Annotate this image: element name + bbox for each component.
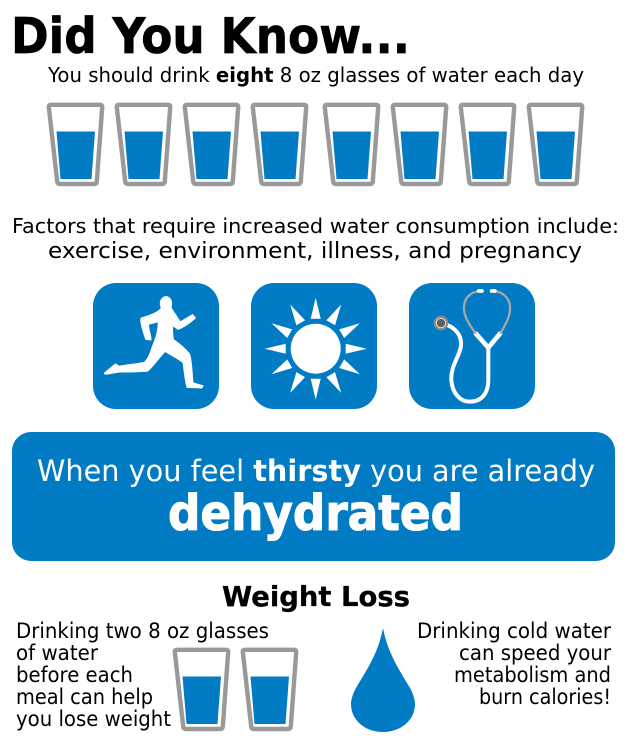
banner: dehydrated callout: dehydrated xyxy=(168,485,463,542)
heading: weight loss: Weight Loss xyxy=(222,580,410,613)
text: cold water: Drinking cold water xyxy=(417,619,611,643)
title: Did You Know... xyxy=(11,8,410,65)
icon: glass 6 xyxy=(393,105,446,184)
icon: glass 3 xyxy=(185,105,238,184)
text: cold water: metabolism and xyxy=(454,663,611,687)
factors text: Factors that require increased water consumption include: xyxy=(12,214,619,238)
icon: glass left xyxy=(175,650,228,729)
icon: glass 1 xyxy=(49,105,102,184)
icon: glass 5 xyxy=(325,105,378,184)
subtitle: You should drink eight 8 oz glasses of water each day xyxy=(47,63,584,87)
icon: glass 2 xyxy=(117,105,170,184)
icon: glass 7 xyxy=(461,105,514,184)
icon: glass right xyxy=(243,650,296,729)
row of eight water glasses xyxy=(49,105,582,184)
icon: two water glasses xyxy=(175,650,296,729)
text: two glasses before meals: of water xyxy=(16,641,98,665)
banner: dehydrated callout xyxy=(12,432,615,561)
icon: sun xyxy=(251,283,377,409)
text: cold water xyxy=(417,619,611,709)
text: cold water: burn calories! xyxy=(479,685,611,709)
factors text: exercise, environment, illness, and pregnancy xyxy=(48,238,582,264)
text: two glasses before meals xyxy=(16,619,269,731)
icon: runner xyxy=(93,283,219,409)
text: two glasses before meals: before each xyxy=(16,663,133,687)
text: two glasses before meals: you lose weight xyxy=(16,707,171,731)
icon: glass 8 xyxy=(529,105,582,184)
icon: water drop xyxy=(351,628,415,732)
factors text xyxy=(12,214,619,264)
text: two glasses before meals: meal can help xyxy=(16,685,153,709)
text: cold water: can speed your xyxy=(459,641,611,665)
icon: stethoscope xyxy=(409,283,535,409)
banner: dehydrated callout: When you feel thirsty you are already xyxy=(37,454,595,488)
icon: glass 4 xyxy=(253,105,306,184)
text: two glasses before meals: Drinking two 8 oz glasses xyxy=(16,619,269,643)
